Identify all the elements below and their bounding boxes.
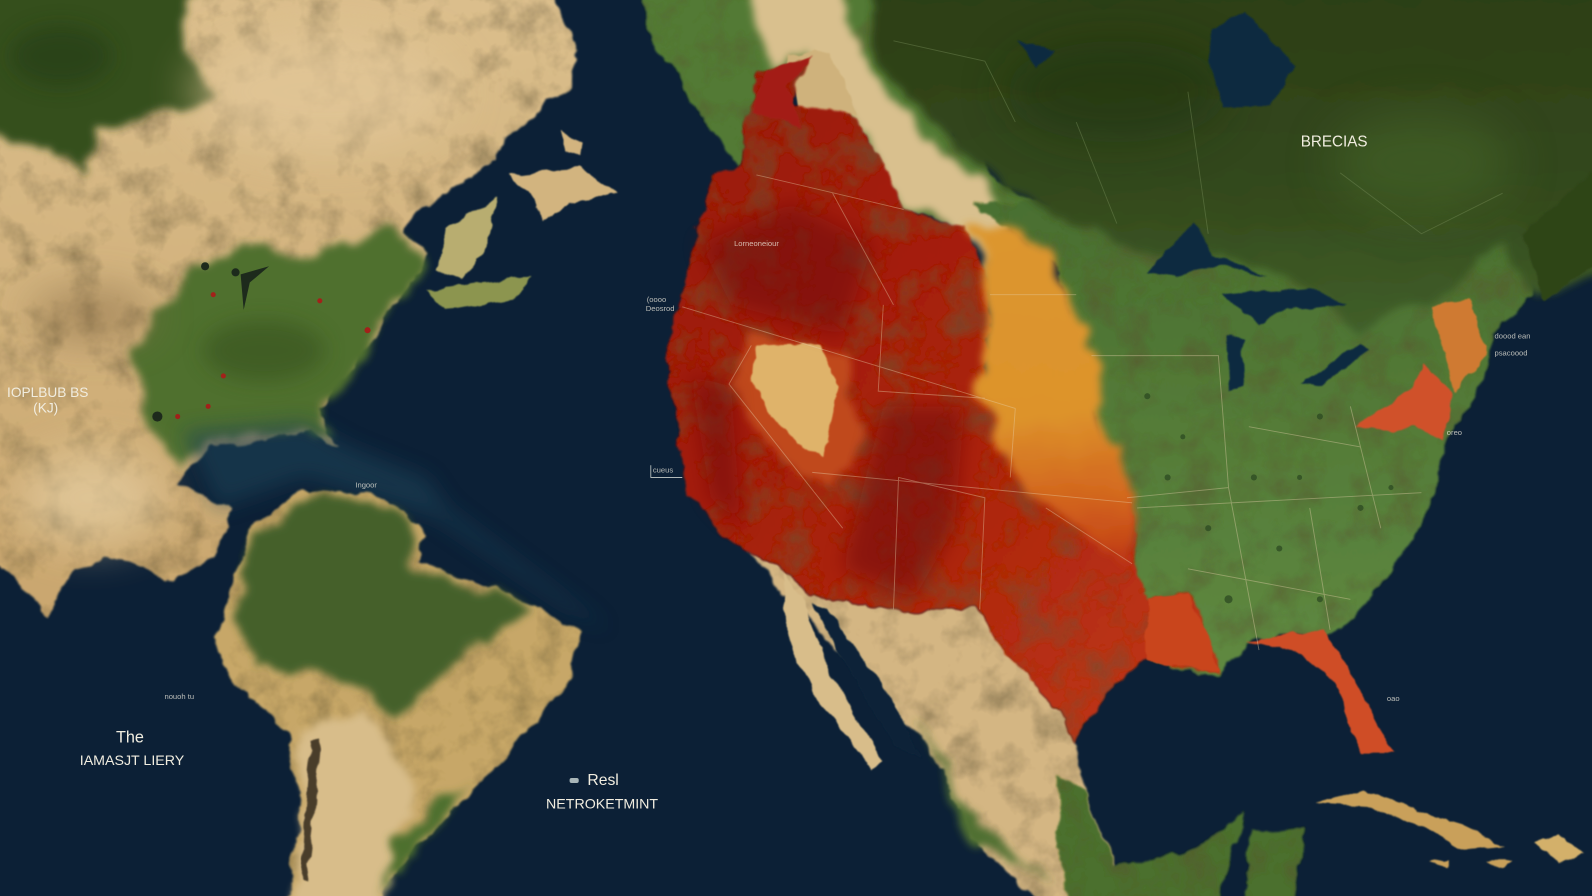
caribbean shallow water bbox=[183, 422, 609, 630]
small coastal labels: Deosrod bbox=[646, 304, 675, 313]
great lakes bbox=[1017, 10, 1369, 391]
tan strip north bbox=[749, 0, 1005, 279]
green central band bbox=[132, 229, 432, 467]
small coastal labels: oreo bbox=[1447, 428, 1462, 437]
label: left continent: (KJ) bbox=[33, 400, 58, 415]
small coastal labels: nouoh tu bbox=[164, 692, 194, 701]
darker green mottling bbox=[10, 26, 325, 381]
label: left continent bbox=[7, 385, 88, 415]
central american green island bbox=[1244, 828, 1305, 896]
tan fill behind red headwaters bbox=[787, 51, 858, 127]
label: The: The bbox=[116, 728, 144, 746]
canada mottling bbox=[1005, 41, 1513, 213]
label: The: IAMASJT LIERY bbox=[80, 753, 185, 769]
label: Real: Resl bbox=[587, 772, 619, 789]
dark red bands bbox=[690, 203, 965, 599]
beige mexico and land base bbox=[746, 554, 1117, 896]
small coastal labels: Lorneoneiour bbox=[734, 239, 779, 248]
small label frame bbox=[651, 465, 682, 477]
south america bbox=[213, 490, 581, 896]
state borders bbox=[682, 175, 1421, 650]
small coastal labels: Ingoor bbox=[355, 481, 377, 490]
dark marks bbox=[152, 262, 269, 422]
canada dark green bbox=[873, 0, 1592, 335]
left continent bbox=[0, 0, 579, 616]
beige land mass bbox=[0, 0, 579, 616]
southeast green coast bbox=[381, 782, 477, 896]
lighter red ring around nevada bbox=[731, 335, 863, 488]
mexico pacific green coast bbox=[919, 716, 1056, 884]
small coastal labels bbox=[164, 239, 1531, 703]
northwest light green coast bbox=[629, 0, 1076, 229]
northern islands bbox=[426, 132, 617, 310]
atlantic canada land bbox=[1523, 153, 1592, 300]
tan highlights on the left continent bbox=[20, 31, 457, 543]
red markers bbox=[175, 292, 371, 419]
orange plains bbox=[972, 222, 1135, 574]
red western united states bbox=[665, 59, 1220, 743]
gulf orange patch louisiana bbox=[1147, 594, 1220, 672]
label: Real: NETROKETMINT bbox=[546, 796, 658, 812]
label: left continent: IOPLBUB BS bbox=[7, 385, 88, 400]
dark green northwest patch bbox=[0, 0, 218, 168]
central american green bbox=[1056, 772, 1244, 896]
mid atlantic orange patch bbox=[1355, 364, 1452, 439]
small coastal labels: (oooo bbox=[647, 295, 666, 304]
baja peninsula bbox=[782, 574, 883, 770]
northern province lines bbox=[893, 41, 1503, 234]
green amazon bbox=[236, 498, 533, 716]
continent base bbox=[213, 490, 581, 896]
small coastal labels: oao bbox=[1387, 694, 1400, 703]
caribbean islands bbox=[1316, 790, 1584, 868]
beige coast west bbox=[289, 711, 416, 896]
label: Real bbox=[546, 772, 658, 812]
beige nevada patch bbox=[751, 343, 838, 459]
small coastal labels: doood ean bbox=[1495, 331, 1531, 340]
florida orange patch bbox=[1247, 630, 1393, 754]
label: BRECIAS: BRECIAS bbox=[1301, 133, 1368, 150]
red outflow top bbox=[751, 56, 812, 127]
label: The bbox=[80, 728, 185, 769]
north america bbox=[629, 0, 1592, 896]
small coastal labels: psacoood bbox=[1495, 349, 1528, 358]
andes ridge bbox=[302, 739, 321, 878]
small coastal labels: cueus bbox=[653, 465, 673, 474]
eastern united states green bbox=[975, 203, 1533, 675]
dark forest spots eastern us bbox=[1144, 393, 1394, 603]
northeast orange patch bbox=[1432, 300, 1487, 391]
sea of cortez bbox=[812, 604, 919, 757]
